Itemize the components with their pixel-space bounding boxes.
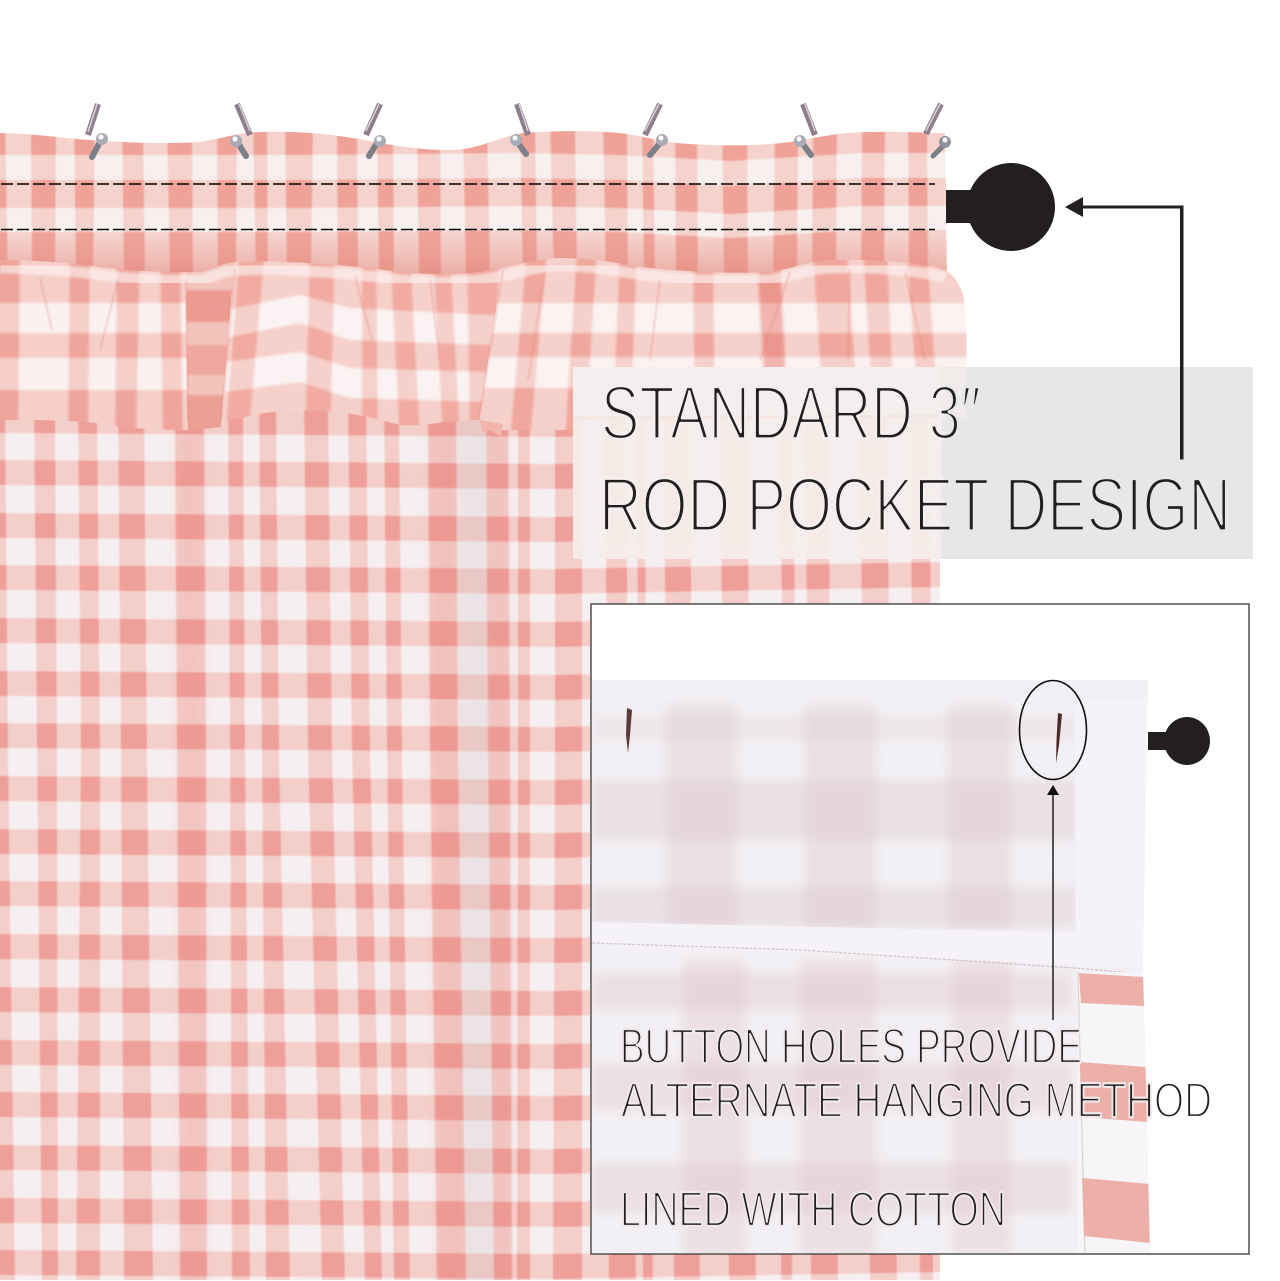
text: button holes note (620, 1020, 1212, 1128)
rod pocket dashed stitching lines (1, 184, 935, 230)
ruffle section left (0, 260, 188, 430)
panel: button hole inset (591, 604, 1249, 1255)
ring 5 (645, 104, 668, 155)
ruffle creases (40, 268, 925, 425)
ring 4 (510, 104, 528, 154)
arrow: button hole callout (1047, 785, 1059, 1020)
callout ellipse around button hole (1020, 680, 1086, 780)
ring 2 (230, 104, 250, 156)
text: lined with cotton: LINED WITH COTTON (620, 1183, 1006, 1237)
ruffle folded tip (480, 420, 503, 437)
ruffle section middle (221, 262, 506, 427)
ring 7 (926, 104, 951, 156)
ruffle (0, 258, 967, 430)
lining fabric photo (592, 680, 1153, 1255)
rod pocket fabric (0, 131, 947, 274)
text: button holes note: BUTTON HOLES PROVIDE (620, 1020, 1082, 1074)
ring 6 (794, 104, 815, 155)
hanging rings and clips (88, 104, 951, 157)
ring 3 (366, 104, 386, 156)
ruffle section right (479, 258, 967, 430)
heading: standard 3 inch: STANDARD 3″ (601, 371, 981, 456)
main curtain body (0, 380, 945, 1281)
ring 1 (88, 104, 108, 157)
icon: left button hole (626, 708, 632, 753)
icon: curtain rod end (946, 163, 1055, 251)
arrow: callout to curtain rod (1065, 197, 1184, 460)
icon: small curtain rod end (1148, 717, 1210, 765)
ruffle fold: dark inner section (186, 262, 236, 429)
hem band (592, 922, 1011, 962)
hem stitching (592, 943, 1143, 974)
icon: right button hole (1056, 713, 1062, 763)
faint curtain show-through (573, 414, 941, 420)
panel: rod pocket label (573, 198, 1253, 1180)
gathered crimp line (0, 266, 945, 282)
side hem with pink stripes (1114, 972, 1143, 975)
